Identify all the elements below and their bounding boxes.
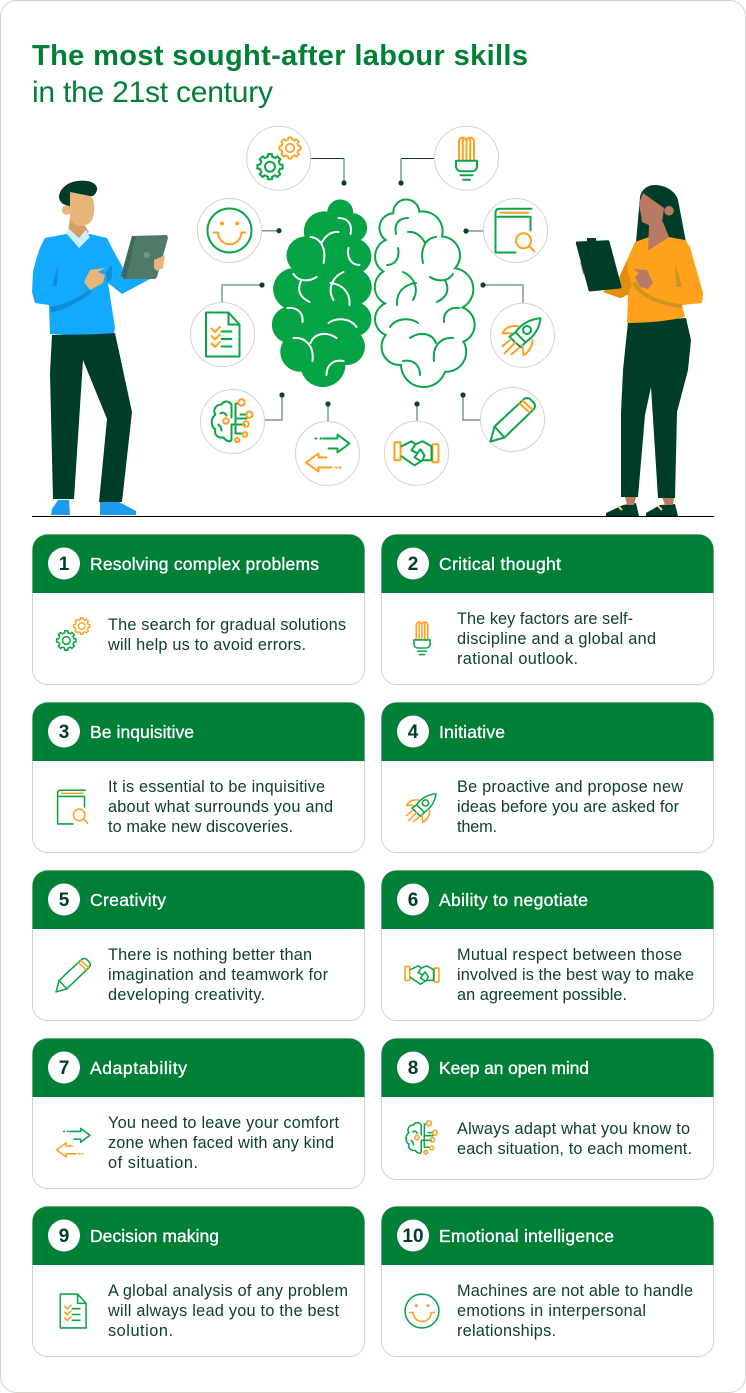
card 3: be inquisitive [32, 702, 364, 852]
card 5: creativity: Creativity [90, 890, 166, 910]
card 9: decision making: will always lead you to the best [107, 1302, 339, 1320]
card 5: creativity: imagination and teamwork for [108, 966, 329, 984]
card 2: critical thought: The key factors are self- [457, 610, 633, 628]
title: The most sought-after labour skills [32, 40, 528, 72]
card 9: decision making [32, 1206, 364, 1356]
card 6: ability to negotiate: an agreement possible. [457, 986, 627, 1004]
icon node: bulb [398, 126, 498, 190]
card 7: adaptability: 7 [59, 1058, 69, 1079]
card 6: ability to negotiate: Mutual respect between those [457, 946, 682, 964]
card 3: be inquisitive: Be inquisitive [90, 722, 194, 742]
card 4: initiative: Initiative [439, 722, 505, 742]
card 7: adaptability: zone when faced with any kind [108, 1134, 334, 1152]
icon node: arrows [296, 401, 360, 486]
card 9: decision making: A global analysis of any problem [108, 1282, 348, 1300]
card 4: initiative [382, 702, 714, 852]
card 4: initiative: them. [457, 818, 497, 836]
card 7: adaptability: of situation. [108, 1154, 198, 1172]
card 3: be inquisitive: 3 [59, 722, 69, 743]
card 5: creativity [32, 870, 364, 1020]
card 9: decision making: solution. [108, 1322, 173, 1340]
card 3: be inquisitive: to make new discoveries. [108, 818, 293, 836]
card 1: resolving complex problems: The search for gradual solutions [108, 616, 346, 634]
card 1: resolving complex problems [32, 534, 364, 684]
ground line [32, 516, 714, 517]
card 6: ability to negotiate: involved is the best way to make [457, 966, 694, 984]
icon node: handshake [384, 401, 448, 485]
illustration: woman with clipboard [577, 185, 703, 516]
card 10: emotional intelligence: Machines are not able to handle [457, 1282, 693, 1300]
card 9: decision making: Decision making [90, 1226, 219, 1246]
card 10: emotional intelligence: Emotional intelligence [439, 1226, 614, 1246]
card 8: keep an open mind: 8 [408, 1058, 418, 1079]
card 3: be inquisitive: about what surrounds you and [108, 798, 333, 816]
card 10: emotional intelligence: relationships. [457, 1322, 556, 1340]
brain: left filled hemisphere [272, 199, 372, 387]
card 2: critical thought: rational outlook. [457, 650, 578, 668]
card 4: initiative: ideas before you are asked for [457, 798, 680, 816]
illustration: man with tablet [32, 181, 168, 515]
card 4: initiative: Be proactive and propose new [457, 778, 683, 796]
card 10: emotional intelligence [382, 1206, 714, 1356]
icon node: gears [247, 126, 347, 190]
card 6: ability to negotiate: 6 [408, 890, 418, 911]
card 5: creativity: developing creativity. [108, 986, 265, 1004]
card 10: emotional intelligence: emotions in interpersonal [457, 1302, 646, 1320]
card 2: critical thought [382, 534, 714, 684]
icon node: rocket [480, 282, 554, 367]
card 5: creativity: 5 [59, 890, 70, 911]
card 2: critical thought: 2 [408, 554, 418, 575]
card 7: adaptability: You need to leave your comfort [108, 1114, 339, 1132]
card 8: keep an open mind: Keep an open mind [439, 1058, 589, 1078]
card 1: resolving complex problems: will help us to avoid errors. [107, 636, 306, 654]
icon node: pencil [460, 388, 544, 452]
card 2: critical thought: Critical thought [439, 554, 561, 574]
card 8: keep an open mind: Always adapt what you know to [457, 1120, 690, 1138]
icon node: smile [198, 198, 282, 262]
card 1: resolving complex problems: 1 [59, 554, 70, 575]
card 7: adaptability [32, 1038, 364, 1188]
card 5: creativity: There is nothing better than [108, 946, 312, 964]
brain: right outlined hemisphere [375, 199, 475, 387]
card 6: ability to negotiate [382, 870, 714, 1020]
card 6: ability to negotiate: Ability to negotiate [439, 890, 588, 910]
card 8: keep an open mind [382, 1038, 714, 1180]
card 8: keep an open mind: each situation, to each moment. [457, 1140, 692, 1158]
card 2: critical thought: discipline and a global and [457, 630, 656, 648]
title [32, 40, 528, 109]
card 7: adaptability: Adaptability [90, 1058, 187, 1078]
icon node: checklist [190, 282, 265, 366]
icon node: brain circuit [200, 390, 285, 454]
title: in the 21st century [32, 76, 273, 109]
card 4: initiative: 4 [408, 722, 419, 743]
card 10: emotional intelligence: 10 [402, 1226, 424, 1247]
card 9: decision making: 9 [59, 1226, 69, 1247]
icon node: book [463, 198, 548, 262]
card 1: resolving complex problems: Resolving complex problems [90, 554, 319, 574]
card 3: be inquisitive: It is essential to be inquisitive [108, 778, 325, 796]
